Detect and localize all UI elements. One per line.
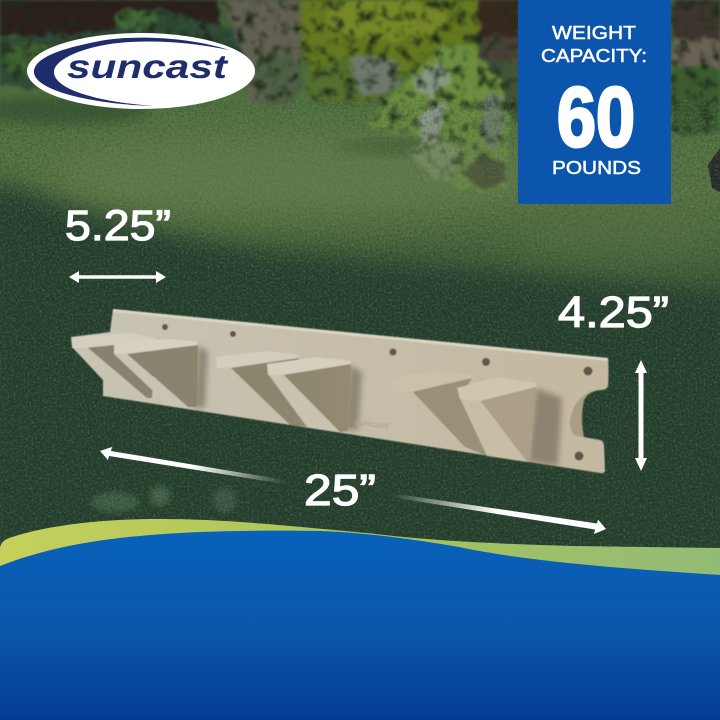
- wave: blue footer: [0, 531, 720, 720]
- wave: green band: [0, 519, 720, 600]
- bracket 4: [267, 357, 351, 432]
- bracket 6: [457, 377, 536, 462]
- label: weight capacity: WEIGHT: [552, 22, 636, 43]
- dimension label: 4.25 inches: 4.25”: [558, 288, 669, 337]
- dimension label: 25 inches: 25”: [304, 466, 376, 515]
- plate shadows: [194, 345, 562, 466]
- label: pounds: POUNDS: [552, 157, 641, 178]
- label: weight capacity: [541, 22, 647, 66]
- panel: weight capacity: [518, 0, 671, 204]
- arrow: length dimension right: [390, 493, 606, 534]
- embossed brand: suncast: [354, 417, 390, 431]
- notch inner wall: [570, 391, 595, 437]
- mounting holes: [162, 324, 592, 460]
- bracket 2: [114, 339, 198, 407]
- icon: logo swoosh: [34, 38, 229, 106]
- label: weight capacity: CAPACITY:: [541, 45, 647, 66]
- rack back plate: [71, 309, 608, 473]
- arrow: width dimension: [69, 271, 166, 283]
- big number 60: 60: [557, 70, 635, 164]
- logo wordmark: suncast: [67, 48, 230, 85]
- arrow: length dimension left: [100, 447, 285, 484]
- dimension label: 5.25 inches: 5.25”: [65, 202, 171, 250]
- product: wall rack bracket: [71, 309, 608, 473]
- bracket 1: [72, 333, 155, 398]
- logo: Suncast oval: [27, 33, 255, 109]
- bracket 3: [216, 351, 307, 427]
- arrow: height dimension: [635, 360, 647, 471]
- bracket 5: [392, 371, 487, 456]
- garden foliage: [0, 0, 720, 192]
